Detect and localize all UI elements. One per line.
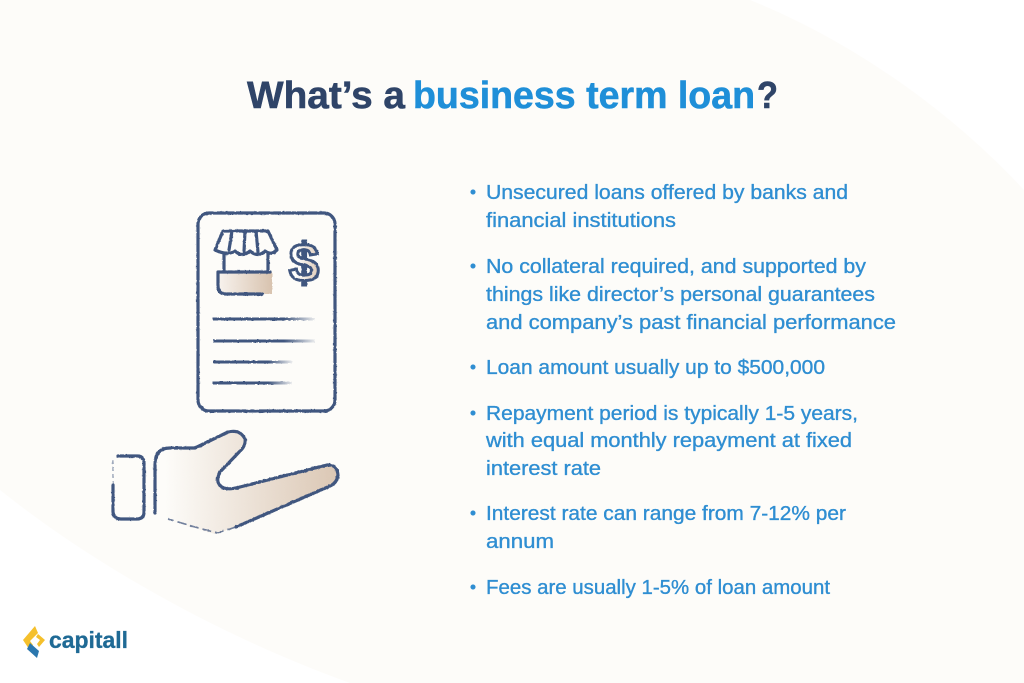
logo: capitall: capitall xyxy=(49,627,128,653)
title xyxy=(247,75,778,117)
bullet: interest rate xyxy=(471,503,846,553)
bullet: interest rate: Interest rate can range from 7-12% per xyxy=(486,503,846,525)
bullet: no collateral: things like director’s personal guarantees xyxy=(486,284,875,306)
bullet: loan amount: Loan amount usually up to $500,000 xyxy=(486,357,825,379)
icon: logo mark xyxy=(23,626,45,658)
title: What’s a xyxy=(247,75,406,117)
bullet: no collateral: and company’s past financial performance xyxy=(486,312,896,334)
bullet: repayment: with equal monthly repayment at fixed xyxy=(485,430,852,452)
bullet: repayment: interest rate xyxy=(486,458,601,480)
illustration: document over hand xyxy=(113,213,338,534)
icon: dollar sign: $ xyxy=(289,233,319,293)
icon: storefront xyxy=(215,231,277,294)
bullet list xyxy=(471,182,896,599)
text lines xyxy=(213,319,315,383)
bullet: no collateral xyxy=(471,256,896,334)
bullet: repayment: Repayment period is typically 1-5 years, xyxy=(486,403,858,425)
title: business term loan xyxy=(413,75,755,117)
bullet: repayment xyxy=(471,403,858,480)
logo: capitall xyxy=(23,626,128,658)
icon: hand xyxy=(113,431,338,534)
bullet: fees: Fees are usually 1-5% of loan amount xyxy=(486,577,830,599)
bullet: unsecured: financial institutions xyxy=(486,210,676,232)
bullet: interest rate: annum xyxy=(486,531,554,553)
title: ? xyxy=(757,75,778,117)
bullet: unsecured: Unsecured loans offered by banks and xyxy=(486,182,848,204)
icon: loan document xyxy=(198,213,335,411)
bullet: no collateral: No collateral required, and supported by xyxy=(486,256,866,278)
bullet: unsecured xyxy=(471,182,848,232)
